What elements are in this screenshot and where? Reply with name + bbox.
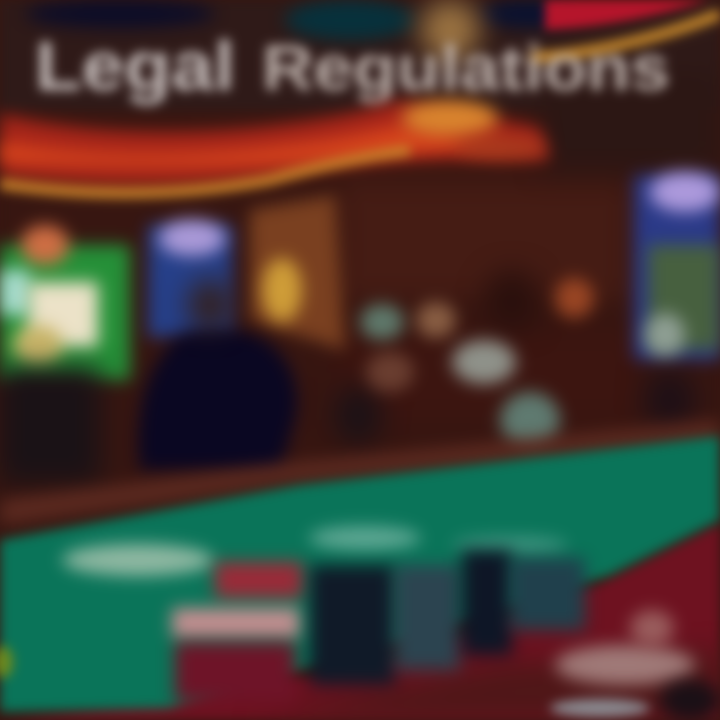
table markings bbox=[62, 526, 568, 576]
stacks of poker chips bbox=[172, 550, 585, 702]
green felt table bbox=[0, 436, 720, 712]
blue centre panel bbox=[148, 220, 232, 337]
lower floor and red rail bbox=[0, 525, 720, 720]
title bbox=[35, 27, 670, 105]
title: Regulations bbox=[262, 32, 670, 104]
ceiling lights and banner bbox=[25, 0, 720, 60]
foreground pink chips bbox=[550, 610, 720, 720]
title: Legal bbox=[35, 27, 235, 105]
red and orange swag bbox=[0, 100, 550, 193]
dark silhouette figure bbox=[138, 279, 297, 470]
wall lamp bbox=[250, 195, 345, 350]
table edge bbox=[0, 420, 720, 525]
background patrons bbox=[334, 270, 695, 448]
left screen bbox=[0, 225, 130, 483]
right panel bbox=[634, 172, 720, 360]
